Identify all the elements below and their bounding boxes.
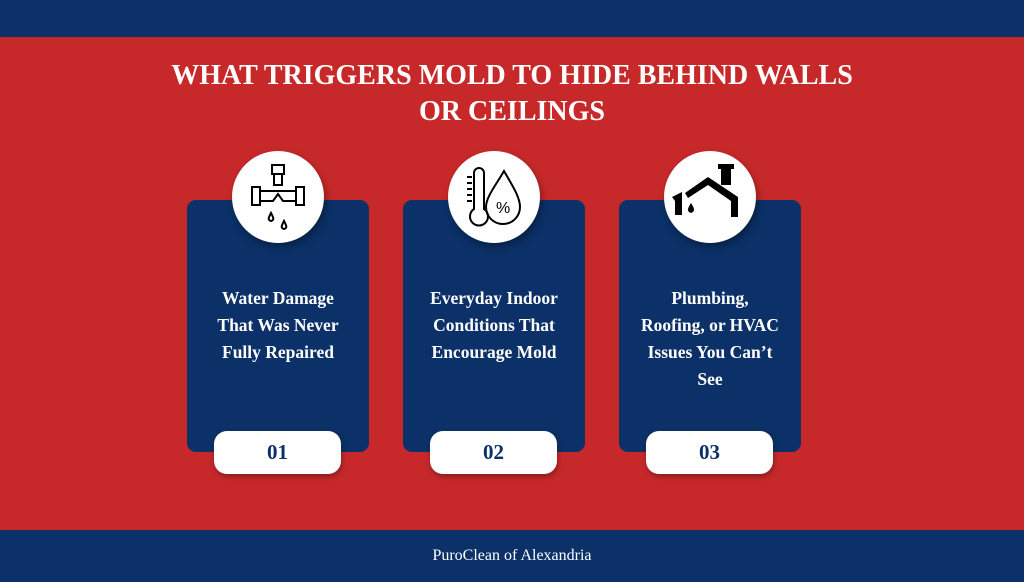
icon: leaking pipe (232, 151, 324, 243)
number 02: 02 (483, 440, 504, 464)
text: card 3: See (697, 369, 723, 389)
panel: card 3 (619, 200, 801, 452)
text: card 1: Fully Repaired (222, 342, 334, 362)
text: card 2: Encourage Mold (432, 342, 556, 362)
icon: roof leak (664, 151, 756, 243)
number 03: 03 (699, 440, 720, 464)
panel: card 2 (403, 200, 585, 452)
text: card 1: Water Damage (222, 288, 334, 308)
text: card 1: That Was Never (217, 315, 339, 335)
number 02 (430, 431, 557, 474)
text: card 2: Everyday Indoor (430, 288, 558, 308)
text: card 2 (430, 288, 558, 362)
text: card 3: Roofing, or HVAC (641, 315, 779, 335)
title: WHAT TRIGGERS MOLD TO HIDE BEHIND WALLS (171, 60, 853, 91)
text: card 1 (217, 288, 339, 362)
number 03 (646, 431, 773, 474)
top bar (0, 0, 1024, 37)
icon: thermometer and humidity drop: % (496, 200, 510, 217)
icon: thermometer and humidity drop (448, 151, 540, 243)
text: card 3 (641, 288, 779, 389)
number 01: 01 (267, 440, 288, 464)
text: card 2: Conditions That (433, 315, 555, 335)
text: card 3: Plumbing, (671, 288, 749, 308)
title: OR CEILINGS (419, 96, 605, 127)
footer: PuroClean of Alexandria (432, 547, 592, 564)
footer (0, 530, 1024, 576)
number 01 (214, 431, 341, 474)
text: card 3: Issues You Can’t (648, 342, 772, 362)
panel: card 1 (187, 200, 369, 452)
title (171, 60, 853, 127)
